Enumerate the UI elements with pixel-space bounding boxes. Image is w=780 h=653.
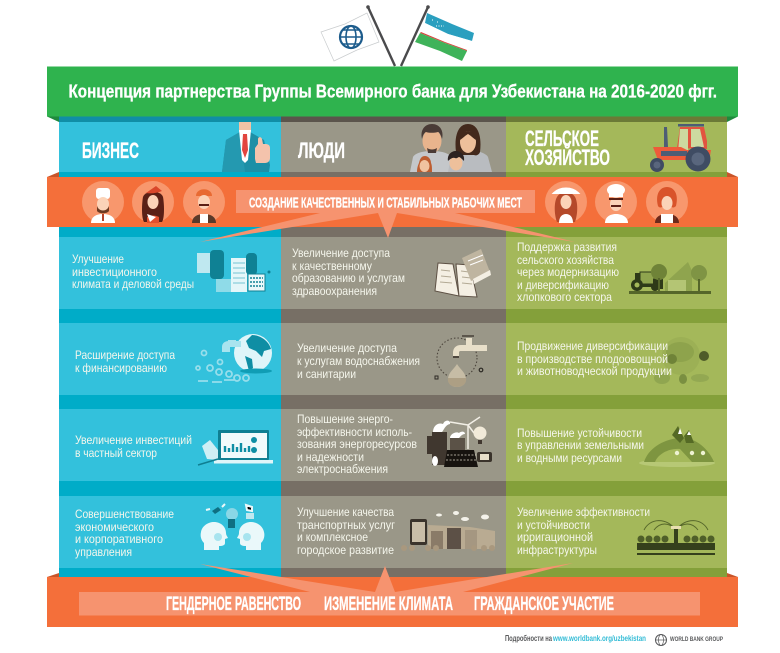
title banner: [47, 66, 738, 116]
row 1 texts: Улучшение: [72, 252, 124, 266]
heading: Люди: ЛЮДИ: [298, 138, 345, 163]
row 3 texts: и водными ресурсами: [517, 451, 622, 465]
row 1 texts: хлопкового сектора: [517, 290, 612, 304]
jobs label: СОЗДАНИЕ КАЧЕСТВЕННЫХ И СТАБИЛЬНЫХ РАБОЧИХ МЕСТ: [249, 196, 522, 212]
icon: heads and lightbulb: [201, 504, 264, 550]
icon: energy set: [427, 417, 492, 467]
row 1 texts: сельского хозяйства: [517, 253, 614, 267]
row 4 texts: управления: [75, 545, 132, 559]
text: diversification of fruit, vegetable and livestock production: в производстве плодоовощной: [517, 352, 668, 366]
row 1 texts: Увеличение доступа: [292, 246, 390, 260]
row 4 texts: Увеличение эффективности: [517, 505, 650, 519]
row 2 texts: Увеличение доступа: [297, 341, 397, 355]
row 4 texts: Улучшение качества: [297, 505, 394, 519]
footer link: www.worldbank.org/uzbekistan: [552, 634, 646, 643]
row 1 texts: здравоохранения: [292, 284, 377, 298]
icon: irrigation: [637, 521, 715, 555]
icon: documents and calculator: [197, 250, 270, 292]
row 3 texts: Повышение энерго-: [297, 412, 393, 426]
row 3 texts: Увеличение инвестиций: [75, 433, 192, 447]
row 4 texts: транспортных услуг: [297, 518, 396, 532]
icon: tractor: [650, 124, 711, 172]
gender label: ГЕНДЕРНОЕ РАВЕНСТВО: [166, 594, 301, 615]
footer link: Подробности на: [505, 634, 552, 643]
row 4 texts: и корпоративного: [75, 532, 163, 546]
row 4 texts: [75, 505, 650, 559]
icon: family: [410, 124, 492, 172]
heading: Сельское хозяйство: СЕЛЬСКОЕ: [525, 126, 599, 151]
row 4 texts: Совершенствование: [75, 507, 174, 521]
icon: books: [435, 249, 491, 297]
climate label: ИЗМЕНЕНИЕ КЛИМАТА: [324, 594, 453, 615]
icon: city and tablet: [401, 511, 495, 551]
arrows to bottom band: [200, 563, 573, 592]
row 1 texts: и диверсификацию: [517, 278, 609, 292]
row 3 texts: электроснабжения: [297, 462, 388, 476]
column backgrounds: [47, 116, 738, 577]
footer logo: WORLD BANK GROUP: [670, 636, 723, 643]
row 4 texts: и комплексное: [297, 530, 368, 544]
flag: Uzbekistan: [401, 5, 474, 66]
footer logo: [656, 634, 723, 646]
row 3 texts: эффективности исполь-: [297, 425, 412, 439]
heading: Сельское хозяйство: [525, 126, 610, 170]
icon: globe, tap and coins: [196, 334, 272, 382]
row 1 texts: климата и деловой среды: [72, 277, 194, 291]
row 1 texts: к качественному: [292, 259, 372, 273]
jobs label: [236, 190, 535, 213]
row 1 texts: [72, 240, 619, 304]
civic label: ГРАЖДАНСКОЕ УЧАСТИЕ: [474, 594, 614, 615]
row 3 texts: в частный сектор: [75, 446, 157, 460]
row 3 texts: и надежности: [297, 450, 364, 464]
worker portraits left: [82, 181, 225, 223]
row 2 texts: и санитарии: [297, 367, 356, 381]
row 2 texts: к услугам водоснабжения: [297, 354, 420, 368]
arrows from jobs band: [200, 213, 575, 242]
icon: hills and water: [639, 426, 715, 467]
row 1 texts: через модернизацию: [517, 265, 619, 279]
icon: laptop with charts: [198, 430, 273, 465]
text: diversification of fruit, vegetable and livestock production: [517, 339, 672, 378]
row 3 texts: в управлении земельными: [517, 438, 644, 452]
row 3 texts: зования энергоресурсов: [297, 437, 417, 451]
band: quality jobs: [47, 177, 738, 227]
row 2 texts: [75, 341, 420, 381]
row 2 texts: к финансированию: [75, 361, 167, 375]
row 4 texts: и устойчивости: [517, 518, 590, 532]
row 4 texts: городское развитие: [297, 543, 394, 557]
icon: fruits and vegetables: [654, 337, 709, 384]
icon: tractor and orchard: [629, 262, 711, 294]
text: diversification of fruit, vegetable and livestock production: Продвижение диверсификации: [517, 339, 668, 353]
text: diversification of fruit, vegetable and livestock production: и животноводческой продукции: [517, 364, 672, 378]
icon: tap and water drop: [435, 336, 487, 387]
row 1 texts: Поддержка развития: [517, 240, 617, 254]
row 1 texts: образованию и услугам: [292, 271, 405, 285]
icon: businessman with thumb up: [222, 122, 270, 172]
heading: Сельское хозяйство: ХОЗЯЙСТВО: [525, 145, 610, 170]
row 4 texts: экономического: [75, 520, 154, 534]
flag: World Bank: [321, 5, 395, 66]
row 3 texts: [75, 412, 644, 476]
row 3 texts: Повышение устойчивости: [517, 426, 642, 440]
row 2 texts: Расширение доступа: [75, 348, 175, 362]
row 4 texts: инфраструктуры: [517, 543, 597, 557]
band: cross-cutting themes: [47, 577, 738, 627]
row 1 texts: инвестиционного: [72, 265, 157, 279]
row 4 texts: ирригационной: [517, 530, 593, 544]
footer link: [505, 634, 646, 643]
heading: Бизнес: БИЗНЕС: [82, 138, 139, 163]
worker portraits right: [545, 181, 688, 223]
